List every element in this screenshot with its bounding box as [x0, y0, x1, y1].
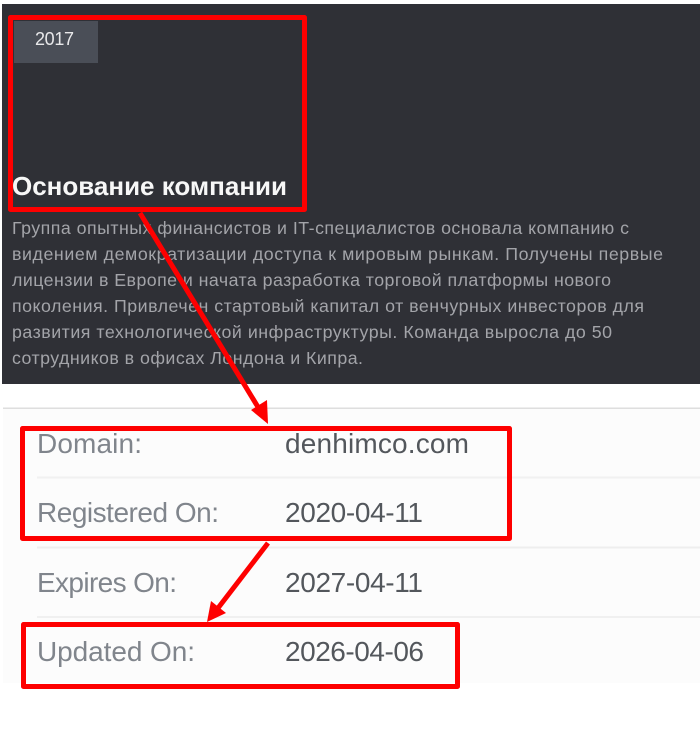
year badge [14, 21, 98, 63]
year badge: 2017 [35, 29, 74, 49]
row: updated on: Updated On: [37, 636, 195, 667]
row: registered on [37, 497, 423, 528]
row: updated on [37, 636, 424, 667]
panel: company founding card [2, 4, 700, 384]
description text: Группа опытных финансистов и IT-специалистов основала компанию с [12, 218, 629, 238]
row: registered on: Registered On: [37, 497, 219, 528]
description text: развития технологической инфраструктуры. Команда выросла до 50 [12, 322, 612, 342]
heading: Основание компании [12, 171, 287, 201]
row: domain [37, 428, 469, 459]
row: expires on: Expires On: [37, 567, 177, 598]
description text [12, 218, 663, 368]
description text: сотрудников в офисах Лондона и Кипра. [12, 348, 363, 368]
arrow: title to domain box [140, 213, 268, 424]
arrow: registered date to updated date [207, 543, 268, 622]
highlight box: year and title [10, 18, 304, 210]
row: domain: denhimco.com [285, 428, 469, 459]
highlight box: domain and registered date [22, 428, 510, 538]
highlight box: updated date [24, 624, 458, 686]
row: domain: Domain: [37, 428, 142, 459]
panel: domain data table [3, 408, 700, 683]
row: registered on: 2020-04-11 [285, 497, 423, 528]
description text: лицензии в Европе и начата разработка торговой платформы нового [12, 270, 611, 290]
row: expires on: 2027-04-11 [285, 567, 423, 598]
description text: видением демократизации доступа к мировым рынкам. Получены первые [12, 244, 663, 264]
description text: поколения. Привлечен стартовый капитал от венчурных инвесторов для [12, 296, 644, 316]
row: expires on [37, 567, 423, 598]
row: updated on: 2026-04-06 [285, 636, 424, 667]
